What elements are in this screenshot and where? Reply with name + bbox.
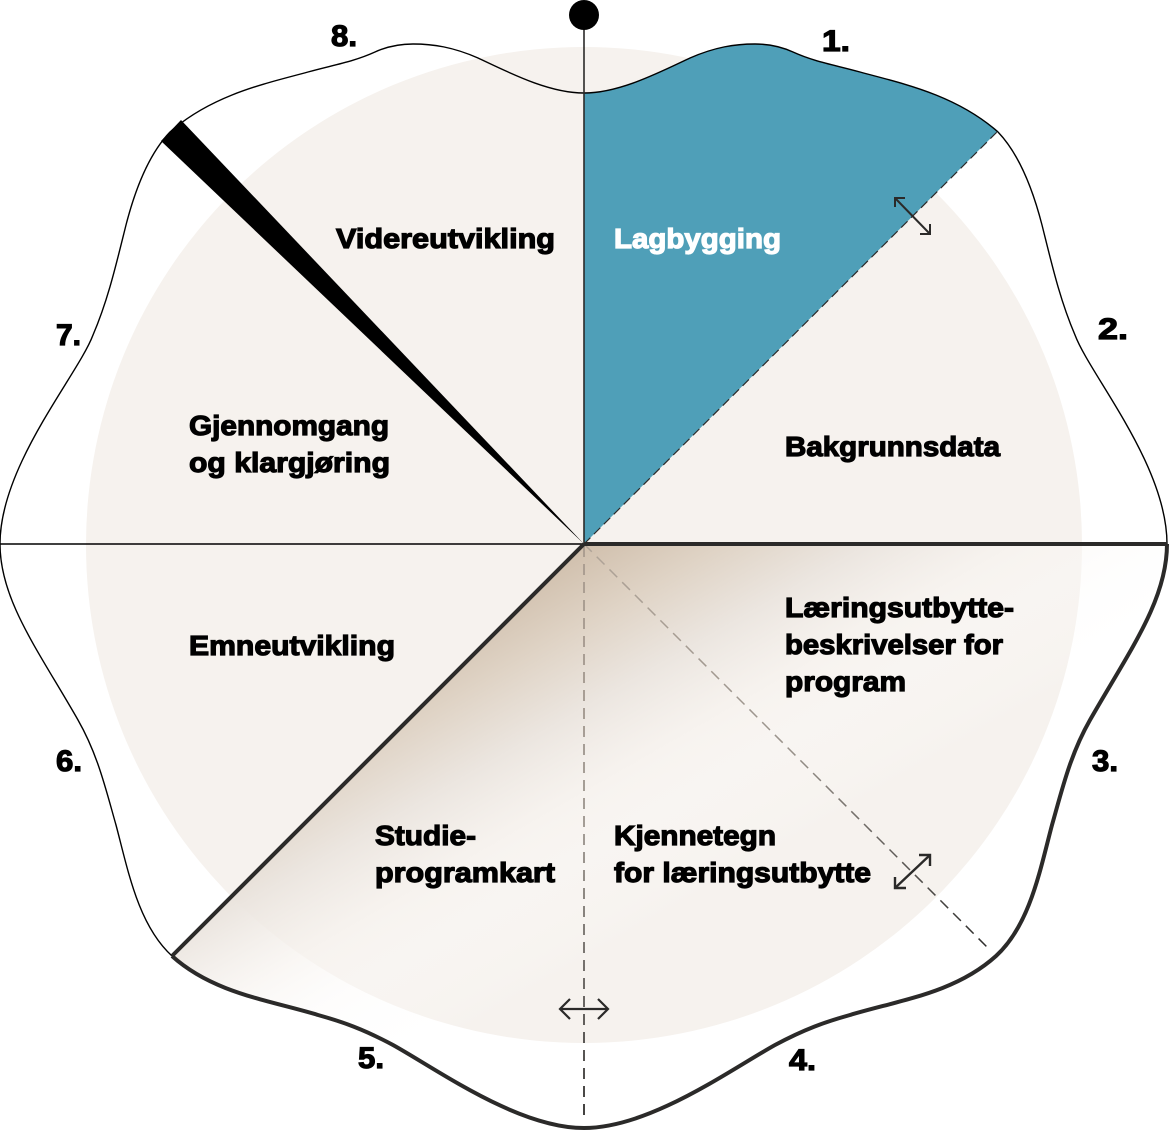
- label: Kjennetegn for læringsutbytte: Kjennetegn: [614, 820, 776, 851]
- dashed vertical spoke: [583, 546, 585, 1122]
- outline: thin upper contour: [0, 44, 1167, 544]
- background circle: [86, 47, 1082, 1043]
- label: Kjennetegn for læringsutbytte: for læringsutbytte: [614, 857, 871, 888]
- outline: thick lower contour: [172, 544, 1167, 1128]
- gradient sectors 3 to 5: [172, 544, 1167, 1128]
- outline: thin lower-left contour: [0, 544, 172, 956]
- label: Læringsutbyttebeskrivelser for program: beskrivelser for: [785, 629, 1003, 660]
- label: Emneutvikling: Emneutvikling: [189, 630, 395, 661]
- black wedge spoke: [161, 120, 584, 544]
- number 3: 3.: [1092, 745, 1118, 778]
- number 2: 2.: [1098, 313, 1128, 346]
- label: Læringsutbyttebeskrivelser for program: program: [785, 666, 906, 697]
- thick right spoke: [584, 542, 1167, 546]
- label: Gjennomgang og klargjøring: [189, 410, 390, 478]
- arrow: bottom double arrow: [560, 999, 608, 1019]
- number 7: 7.: [56, 319, 81, 352]
- number 8: 8.: [331, 20, 357, 53]
- label: Læringsutbyttebeskrivelser for program: Læringsutbytte-: [785, 592, 1014, 623]
- thick lower-left spoke: [172, 544, 584, 956]
- label: Læringsutbyttebeskrivelser for program: [785, 592, 1014, 697]
- label: Lagbygging: Lagbygging: [614, 223, 781, 254]
- dashed spoke along blue sector: [584, 131, 998, 544]
- label: Studieprogramkart: [375, 820, 555, 888]
- label: Videreutvikling: Videreutvikling: [336, 223, 555, 254]
- label: Studieprogramkart: Studie-: [375, 820, 476, 851]
- label: Gjennomgang og klargjøring: og klargjøring: [189, 447, 390, 478]
- number 5: 5.: [358, 1042, 384, 1075]
- label: Studieprogramkart: programkart: [375, 857, 555, 888]
- number 1: 1.: [822, 25, 850, 58]
- label: Bakgrunnsdata: Bakgrunnsdata: [785, 431, 1000, 462]
- left horizontal spoke: [0, 543, 584, 545]
- label: Kjennetegn for læringsutbytte: [614, 820, 871, 888]
- arrow: top right double arrow: [895, 198, 930, 234]
- top pointer with dot: [569, 0, 599, 544]
- dashed diagonal spoke: [584, 544, 990, 950]
- label: Gjennomgang og klargjøring: Gjennomgang: [189, 410, 389, 441]
- arrow: lower right double arrow: [895, 855, 930, 888]
- number 6: 6.: [56, 745, 82, 778]
- blue sector: Lagbygging: [584, 44, 998, 544]
- number 4: 4.: [789, 1044, 816, 1077]
